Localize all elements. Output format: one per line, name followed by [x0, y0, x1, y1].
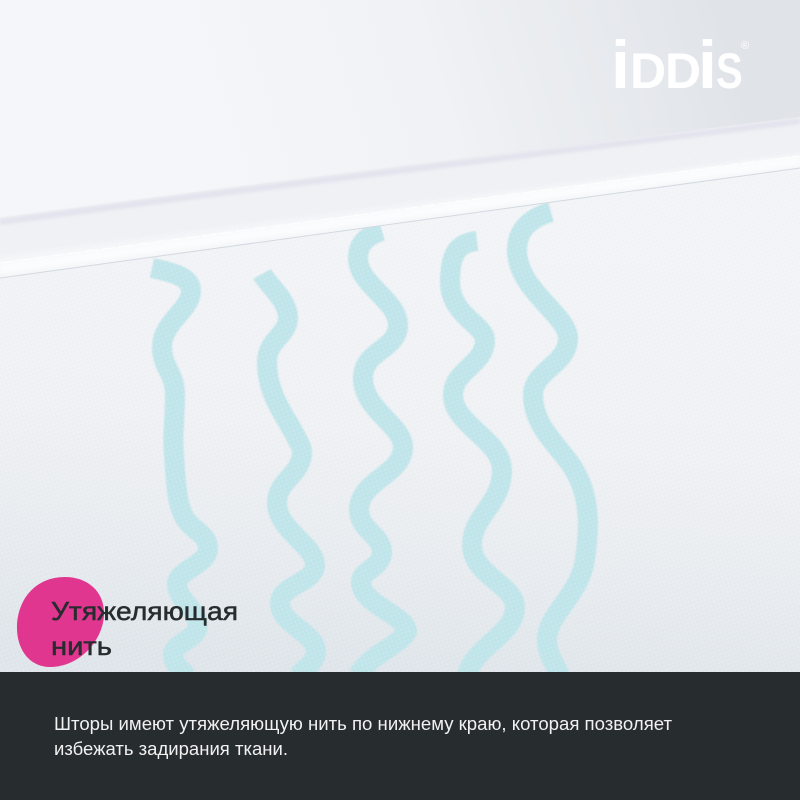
dark caption panel [0, 672, 800, 800]
heading: Утяжеляющая [51, 596, 238, 626]
pink blob behind heading [17, 577, 104, 667]
wave 3 [358, 231, 407, 675]
wave 4 [450, 241, 515, 675]
blue wavy threads [152, 212, 588, 676]
caption text: избежать задирания ткани. [54, 739, 288, 759]
logo: iDDiS [611, 27, 749, 103]
fold hem of curtain [0, 117, 800, 278]
logo: iDDiS: S [716, 43, 743, 99]
caption text [54, 714, 672, 759]
curtain fabric [0, 168, 800, 672]
logo: iDDiS: D [630, 43, 666, 99]
wave 2 [262, 274, 316, 676]
wave 5 [517, 212, 588, 676]
caption text: Шторы имеют утяжеляющую нить по нижнему краю, которая позволяет [54, 714, 672, 734]
heading: нить [51, 631, 112, 661]
wave 1 [152, 268, 208, 676]
logo: iDDiS: i [611, 27, 630, 103]
logo: iDDiS: i [698, 27, 717, 103]
logo: iDDiS: ® [741, 40, 749, 52]
fabric weave texture [0, 168, 800, 672]
logo: iDDiS: D [665, 43, 701, 99]
heading [51, 596, 238, 661]
